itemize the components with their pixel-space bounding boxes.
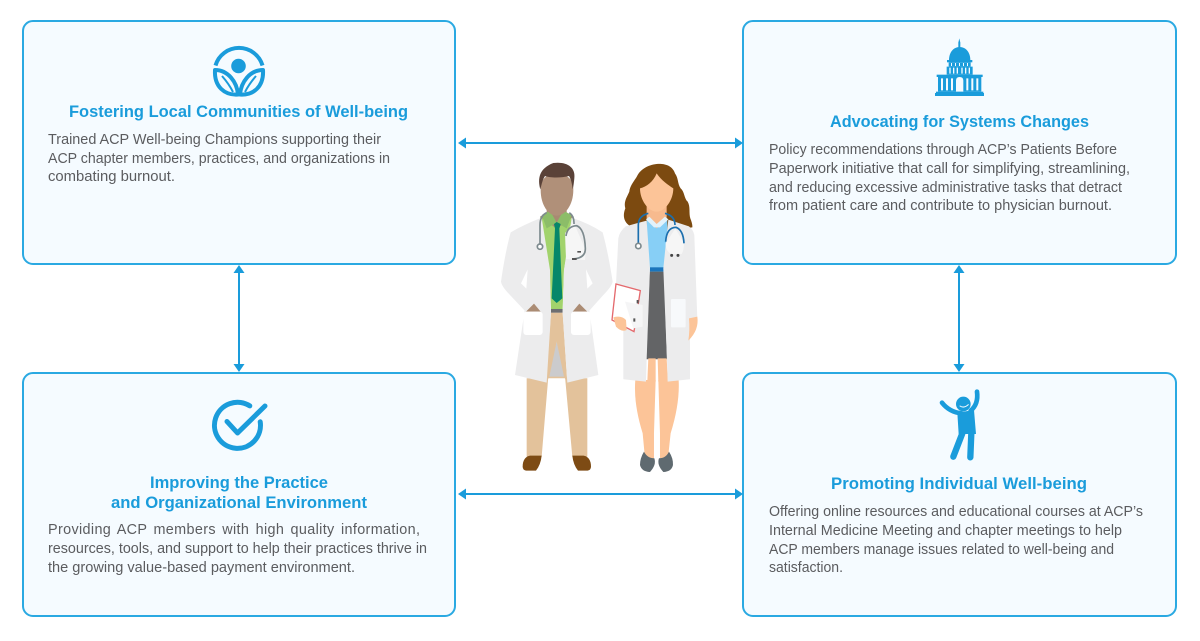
- body text: [769, 142, 1130, 214]
- body text: resources, tools, and support to help their practices thrive in: [48, 541, 427, 557]
- body text: [769, 504, 1143, 576]
- body text: [48, 132, 390, 185]
- heading: and Organizational Environment: [111, 494, 368, 512]
- body text: Internal Medicine Meeting and chapter meetings to help: [769, 523, 1122, 539]
- panel: advocating for systems changes: [743, 21, 1176, 264]
- heading: Improving the Practice: [150, 474, 328, 492]
- panel: promoting individual well-being: [743, 373, 1176, 616]
- icon: check mark in circle: [214, 402, 265, 448]
- arrow: top horizontal: [458, 138, 743, 148]
- heading: Promoting Individual Well-being: [831, 475, 1087, 493]
- body text: Paperwork initiative that call for simplifying, streamlining,: [769, 161, 1130, 177]
- body text: the growing value-based payment environment.: [48, 560, 355, 576]
- body text: combating burnout.: [48, 169, 175, 185]
- body text: Trained ACP Well-being Champions supporting their: [48, 132, 381, 148]
- panel: fostering local communities: [23, 21, 455, 264]
- body text: [48, 522, 427, 576]
- body text: ACP chapter members, practices, and organizations in: [48, 151, 390, 167]
- body text: Offering online resources and educational courses at ACP’s: [769, 504, 1143, 520]
- heading: Advocating for Systems Changes: [830, 113, 1089, 131]
- panel: improving the practice: [23, 373, 455, 616]
- icon: person with leaves: [215, 48, 263, 95]
- arrow: bottom horizontal: [458, 488, 743, 500]
- body text: Providing ACP members with high quality information,: [48, 522, 420, 538]
- heading: [111, 474, 368, 512]
- heading: Fostering Local Communities of Well-being: [69, 103, 408, 121]
- icon: capitol building: [935, 38, 984, 96]
- body text: ACP members manage issues related to well-being and: [769, 542, 1114, 558]
- body text: from patient care and contribute to physician burnout.: [769, 198, 1112, 214]
- body text: and reducing excessive administrative tasks that detract: [769, 180, 1122, 196]
- arrow: right vertical: [954, 265, 964, 372]
- arrow: left vertical: [234, 265, 244, 372]
- body text: satisfaction.: [769, 560, 843, 576]
- female doctor: [612, 164, 698, 472]
- male doctor: [501, 163, 613, 471]
- icon: celebrating person: [942, 392, 977, 457]
- body text: Policy recommendations through ACP’s Patients Before: [769, 142, 1117, 158]
- illustration: two doctors: [501, 163, 698, 472]
